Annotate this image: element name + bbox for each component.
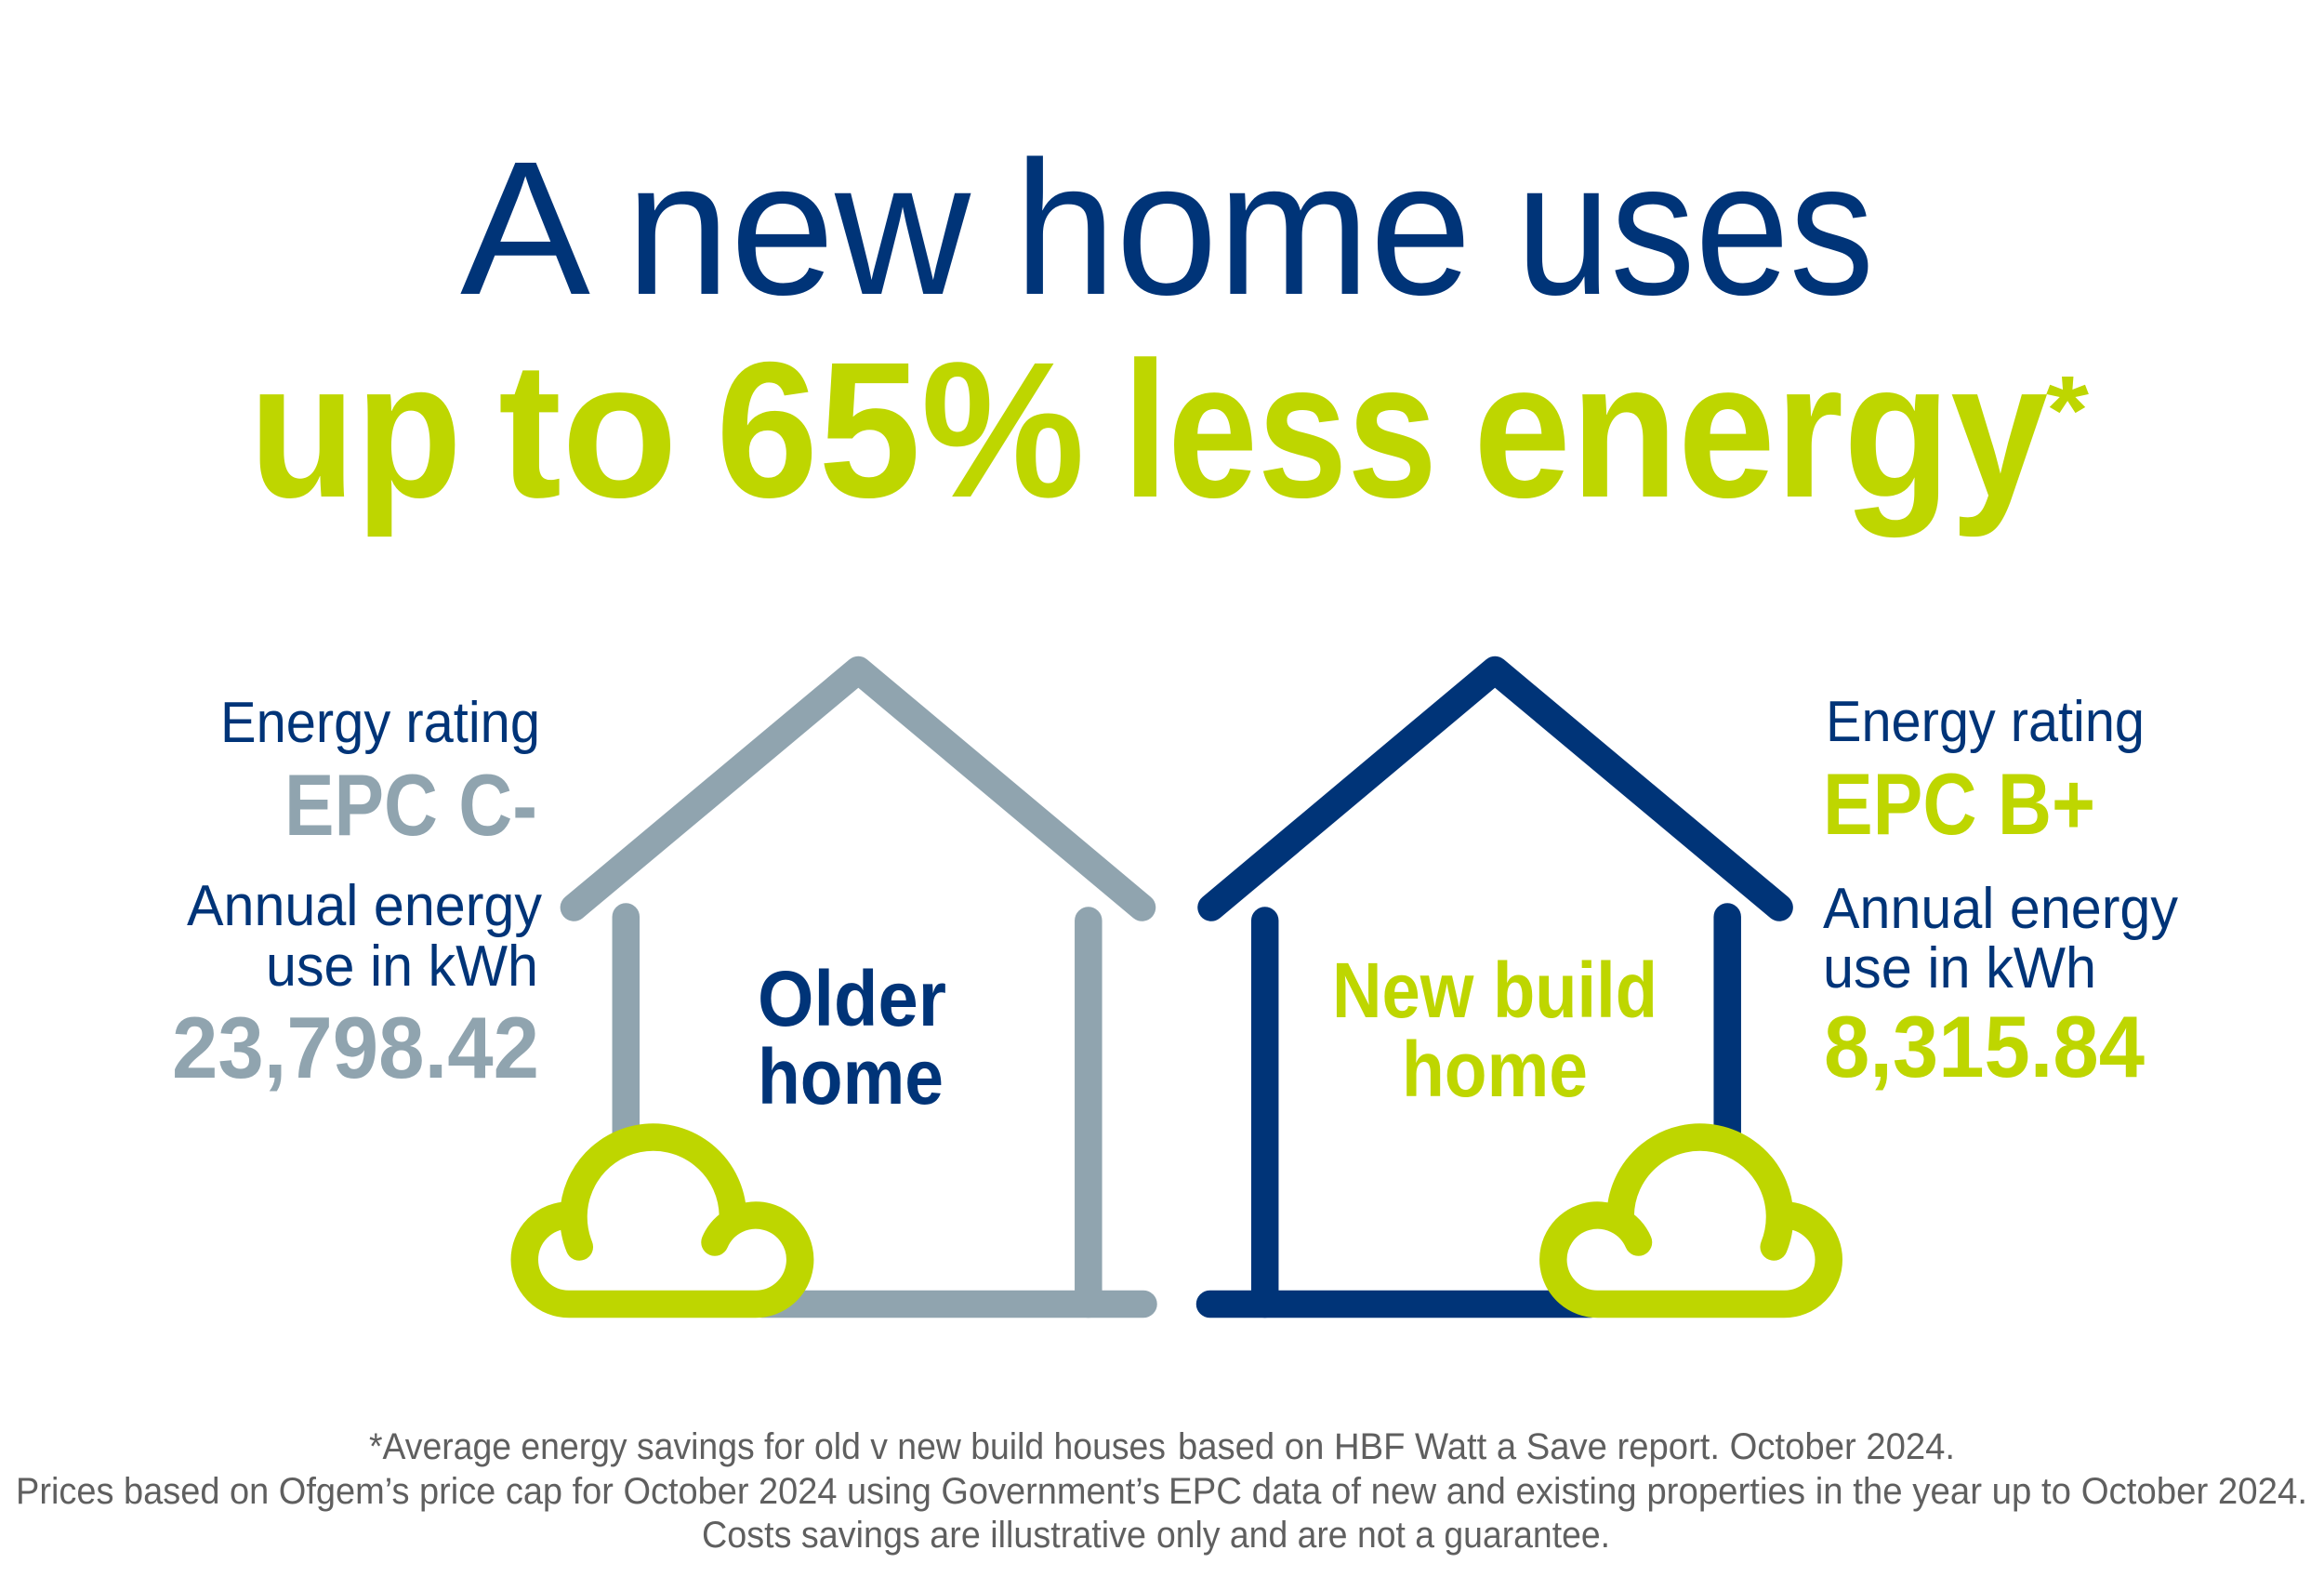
panel: older home statistics — [172, 691, 542, 1096]
title line 2: 65% — [716, 323, 1085, 538]
title — [249, 122, 2089, 538]
label: older home: home — [758, 1033, 944, 1120]
footnote: *Average energy savings for old v new build houses — [369, 1426, 1166, 1467]
footnote — [16, 1426, 2307, 1556]
title line 1: home — [1014, 122, 1472, 335]
icon: new build house — [1210, 669, 1779, 1304]
value: EPC C-: EPC C- — [284, 756, 537, 854]
title line 1 — [460, 122, 1874, 335]
value: 23,798.42: 23,798.42 — [172, 999, 539, 1096]
icon: older home cloud — [524, 1137, 800, 1304]
title line 2: up — [249, 323, 462, 538]
label: annual energy: Annual energy — [187, 874, 542, 938]
title asterisk: * — [2046, 356, 2089, 465]
title line 2: less — [1123, 323, 1437, 538]
panel: new build statistics — [1823, 690, 2178, 1095]
title line 2: energy — [1473, 323, 2048, 538]
label: use in kWh: use in kWh — [266, 934, 538, 999]
icon: older home house — [574, 669, 1143, 1304]
title line 1: uses — [1516, 122, 1874, 335]
label: energy rating: Energy rating — [1826, 690, 2145, 754]
footnote: Costs savings are illustrative — [702, 1515, 1146, 1556]
label: new build home: New build — [1332, 947, 1657, 1034]
title line 2 — [249, 323, 2048, 538]
label: older home — [758, 955, 946, 1120]
footnote: EPC data of new and existing properties in the year up to October 2024. — [1169, 1471, 2307, 1512]
value: 8,315.84: 8,315.84 — [1824, 998, 2145, 1095]
label: energy rating: Energy rating — [220, 691, 540, 755]
title line 2: to — [498, 323, 678, 538]
label: use in kWh: use in kWh — [1823, 936, 2096, 1000]
label: new build home — [1332, 947, 1657, 1113]
title line 1: new — [626, 122, 971, 335]
footnote: only and are not a guarantee. — [1156, 1515, 1610, 1556]
footnote: Prices based on Ofgem’s price cap for October 2024 using Government’s — [16, 1471, 1160, 1512]
icon: new build cloud — [1553, 1137, 1829, 1304]
label: older home: Older — [758, 955, 946, 1042]
title line 1: A — [460, 122, 590, 335]
footnote: based on HBF Watt a Save report. October 2024. — [1178, 1426, 1955, 1467]
label: annual energy: Annual energy — [1823, 877, 2178, 941]
value: EPC B+: EPC B+ — [1823, 755, 2095, 853]
label: new build home: home — [1402, 1026, 1588, 1113]
